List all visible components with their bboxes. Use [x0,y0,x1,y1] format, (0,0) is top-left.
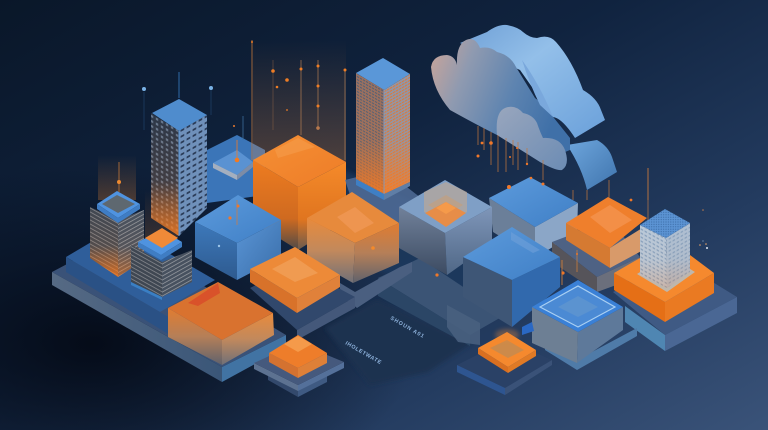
blue box G [195,195,281,280]
small orange box K on slab [254,335,344,397]
orange dot and pin [235,140,239,162]
sparkles near tower P [630,168,708,249]
translucent orange box H with stepped pyramid [307,192,412,308]
tall tower B with blue cap [345,58,430,225]
text label: iholetwate: IHOLETWATE [344,341,382,366]
cloud: main front face [431,39,570,160]
rising data lines and orange particles [251,40,346,160]
tower A with windows [151,99,207,236]
blue top box M [489,177,578,258]
orange box Q [614,255,714,322]
small tower D with orange roof [131,190,192,300]
rain lines with orange dots under cloud [478,126,648,200]
pale tower P [637,209,695,292]
cloud: lower right extrusion [567,140,617,190]
flat orange box I [250,247,340,313]
cloud [431,25,617,190]
small tower C with orange base [90,155,144,277]
cloud: highlight curve [522,60,553,117]
dark slab under flat orange box [250,265,355,340]
orange tray S on dark slab [457,329,552,395]
text label: shoun 201: SHOUN A01 [389,316,426,340]
orange glow streak lines near box O [561,250,578,285]
blue tier [66,225,215,312]
orange rain droplets [476,141,544,189]
big orange box [253,40,346,250]
grey box L with glass cube [399,180,492,277]
left base platform [52,225,286,382]
lower dark platform under orange box N [552,220,640,292]
blue back box with small platform [207,135,265,203]
slab under orange box Q [613,262,737,351]
cloud: small front lobe [497,107,567,170]
antenna dots around tower A [142,72,243,140]
blue box O [463,227,560,327]
large orange box J [168,282,274,365]
blue ring box R with base [522,280,637,370]
cloud: main extrusion [460,25,605,138]
orange box N [566,197,647,268]
back floor slabs [320,170,560,385]
